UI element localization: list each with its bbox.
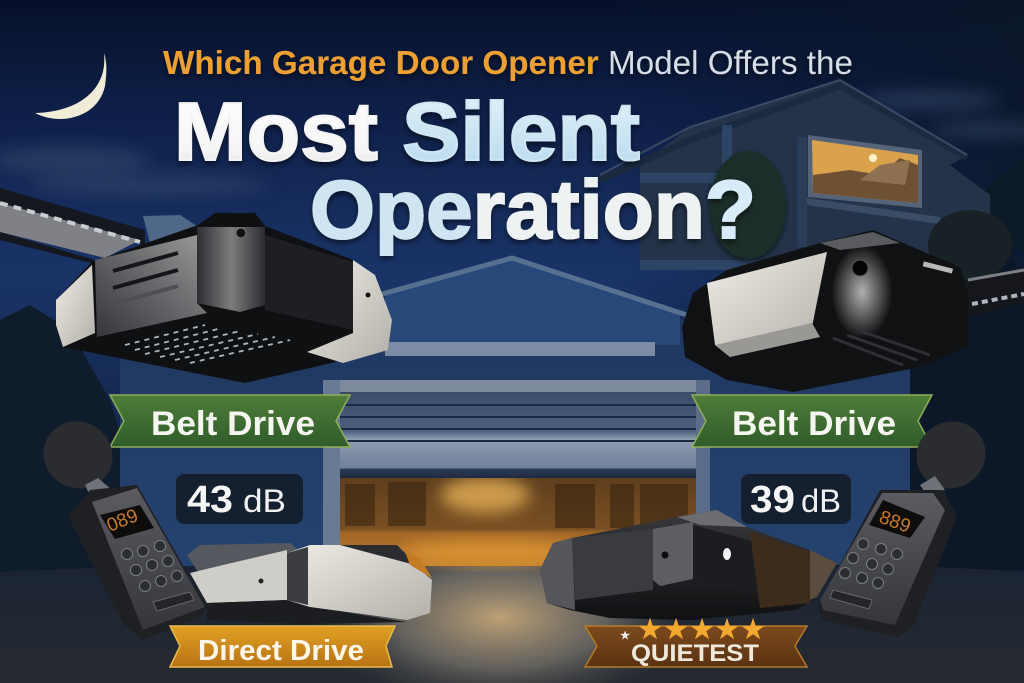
readout: 43 dB	[176, 474, 303, 524]
five stars: ★	[715, 614, 739, 644]
headline line 3: Operation?	[310, 163, 756, 256]
center block	[197, 227, 265, 312]
five stars: ★	[620, 630, 630, 642]
opener: quietest black	[540, 510, 837, 620]
ground driveway	[0, 528, 1024, 683]
sound meter: right	[817, 409, 998, 637]
slotted grey panel	[95, 235, 207, 337]
readout: 43 dB: 43	[187, 479, 233, 521]
five stars: ★	[690, 614, 714, 644]
readout: 39 dB: dB	[801, 483, 841, 519]
label: direct drive	[170, 626, 395, 667]
right white cap	[307, 260, 392, 363]
five stars: ★	[741, 614, 765, 644]
label: quietest with stars: QUIETEST	[631, 640, 759, 667]
clouds	[0, 90, 1024, 195]
five stars: ★	[638, 614, 662, 644]
rolled garage door	[340, 392, 696, 478]
readout: 39 dB	[741, 474, 851, 524]
open garage interior	[340, 477, 696, 566]
label: quietest with stars	[585, 614, 807, 667]
label: right belt drive	[692, 395, 932, 447]
headline line 1: Which Garage Door Opener Model Offers the	[163, 44, 853, 81]
trees	[0, 157, 1024, 575]
five stars: ★	[664, 614, 688, 644]
label: left belt drive	[110, 395, 350, 447]
left white cap	[56, 265, 95, 347]
upper house	[600, 80, 1012, 280]
tree by house	[710, 151, 786, 259]
keypad dots	[125, 325, 290, 363]
opener: top left belt drive	[56, 213, 392, 383]
label: right belt drive: Belt Drive	[732, 405, 896, 443]
opener: direct drive white	[187, 543, 432, 624]
white panel	[707, 252, 827, 357]
readout: 39 dB: 39	[750, 479, 795, 521]
sound meter: left	[31, 409, 207, 640]
right rail	[965, 268, 1024, 318]
garage building	[120, 258, 910, 570]
left rail	[0, 188, 200, 264]
sound meter: left: 089	[104, 505, 141, 537]
label: left belt drive: Belt Drive	[151, 405, 315, 443]
readout: 43 dB: dB	[243, 483, 286, 519]
moon	[35, 53, 106, 119]
headline line 2: Most Silent	[174, 85, 640, 178]
five stars	[620, 614, 765, 644]
label: direct drive: Direct Drive	[198, 635, 364, 667]
sound meter: right: 889	[876, 507, 913, 538]
right panel	[265, 235, 353, 330]
bedroom window	[808, 135, 922, 208]
opener: top right belt drive	[682, 230, 968, 392]
tree right of house	[928, 210, 1012, 280]
